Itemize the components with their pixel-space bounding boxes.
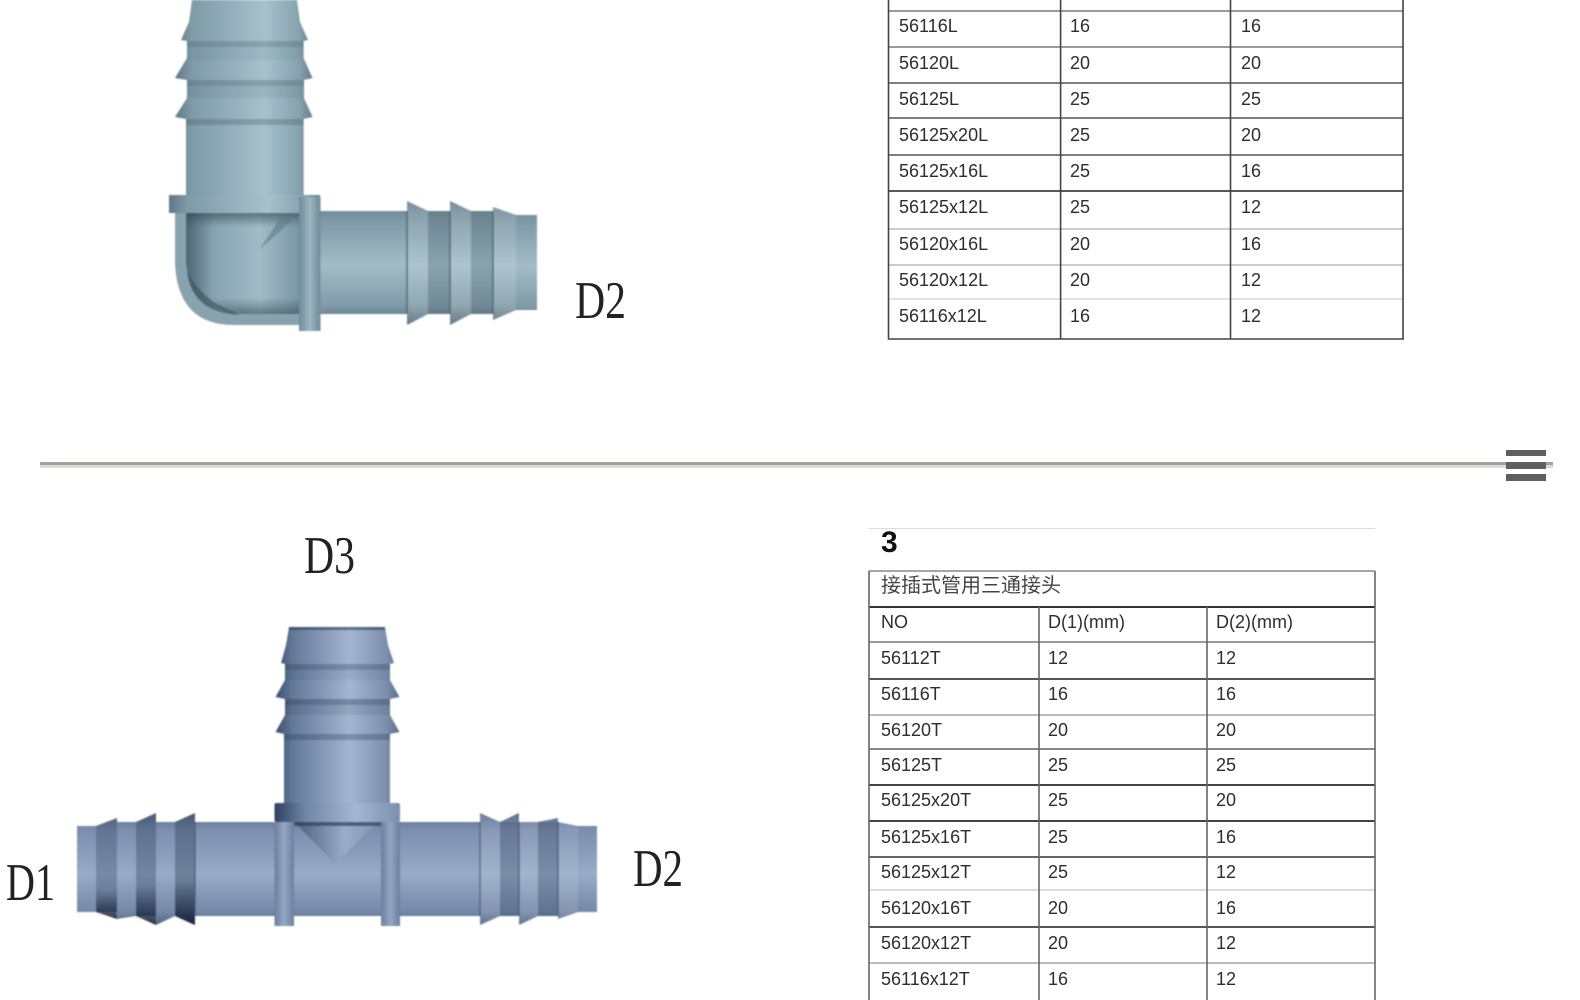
table 1 rows: 56120x16L (899, 234, 988, 254)
table 2 rows: 56120x16T (881, 898, 971, 918)
table 1 rows: 56116L (899, 16, 958, 36)
table 2 rows: 20 (1216, 790, 1236, 810)
tee: horizontal barbed tube (77, 813, 597, 925)
table 1 rows: 56125L (899, 89, 959, 109)
tee: right barb lit faces (480, 813, 578, 925)
tee: vertical barbed stem (276, 627, 400, 805)
elbow: barb lit faces (407, 201, 516, 325)
table 1 rows: 20 (1070, 234, 1090, 254)
section number 3: 3 (881, 526, 898, 559)
label D2 (elbow): D2 (575, 272, 626, 330)
table 2 rows: 25 (1048, 790, 1068, 810)
tee: junction shadow (294, 822, 381, 826)
table 2 rows: 56120x12T (881, 933, 971, 953)
table 1 rows (899, 16, 1261, 326)
table 2 rows: NO (881, 612, 908, 632)
table 2 rows: 12 (1048, 648, 1068, 668)
tee: stem groove bands (284, 664, 390, 740)
table 2 rows: 25 (1216, 755, 1236, 775)
elbow: vertical collar (299, 197, 320, 331)
table 1 rows: 56125x16L (899, 161, 988, 181)
label D2 (tee): D2 (633, 840, 683, 898)
table 2 rows: 16 (1216, 827, 1236, 847)
table 2 rows: 25 (1048, 755, 1068, 775)
table 1 rows: 16 (1241, 16, 1261, 36)
table: tee sizes (869, 528, 1375, 1000)
table 2 rows: 16 (1048, 969, 1068, 989)
tee: barb shadow 2 (136, 885, 156, 925)
table 1 rows: 20 (1070, 53, 1090, 73)
table 2 rows: D(2)(mm) (1216, 612, 1293, 632)
tee: left vertical collar (274, 822, 294, 926)
elbow: vertical barbed stem (175, 0, 312, 197)
table 1 rows: 56125x12L (899, 197, 988, 217)
table 1 grid (888, 0, 1404, 340)
table 1 rows: 56125x20L (899, 125, 988, 145)
tee: left barb shadow 1 (96, 890, 117, 919)
tee: junction collar (274, 803, 400, 822)
table 1 rows: 25 (1070, 161, 1090, 181)
table 1 rows: 56120x12L (899, 270, 988, 290)
table 2 rows: 20 (1048, 933, 1068, 953)
table 2 rows: 56116T (881, 684, 941, 704)
table 1 rows: 20 (1070, 270, 1090, 290)
tee: stem top shadow (289, 627, 385, 630)
table 1 rows: 16 (1241, 234, 1261, 254)
elbow: tube groove bands (428, 211, 493, 314)
table 1 rows: 12 (1241, 306, 1261, 326)
icon: hamburger menu (1506, 450, 1546, 481)
elbow: stem groove bands (186, 41, 304, 125)
table 1 rows: 16 (1070, 306, 1090, 326)
tee: left barb dark faces (96, 813, 195, 925)
elbow: bottom shade of bend (212, 298, 300, 314)
table 2 rows: 16 (1216, 684, 1236, 704)
table 2 rows: 20 (1048, 720, 1068, 740)
table 2 rows: 20 (1216, 720, 1236, 740)
table 2 title: 接插式管用三通接头 (881, 574, 1061, 597)
table: elbow sizes (888, 0, 1404, 340)
table 1 rows: 16 (1241, 161, 1261, 181)
elbow: horizontal collar (169, 195, 320, 213)
table 2 rows: 56125x16T (881, 827, 971, 847)
tee: barb shadow 3 (175, 880, 195, 925)
table 2 rows: 20 (1048, 898, 1068, 918)
table 2 rows: 56120T (881, 720, 942, 740)
table 1 rows: 16 (1070, 16, 1090, 36)
table 1 rows: 25 (1070, 197, 1090, 217)
table 1 rows: 56116x12L (899, 306, 987, 326)
elbow fitting illustration (169, 0, 537, 331)
table 2 rows: 56112T (881, 648, 941, 668)
table 2 rows: 56125T (881, 755, 942, 775)
table 1 rows: 25 (1070, 89, 1090, 109)
label D1: D1 (6, 854, 55, 912)
table 2 rows: 56125x20T (881, 790, 971, 810)
table 2 rows: D(1)(mm) (1048, 612, 1125, 632)
table 2 rows: 56125x12T (881, 862, 971, 882)
tee: barb edge lines (195, 822, 558, 916)
table 2 rows: 12 (1216, 933, 1236, 953)
table 1 rows: 20 (1241, 53, 1261, 73)
elbow: inner bend body (186, 213, 300, 314)
elbow: bend shadow (187, 272, 238, 315)
tee fitting illustration (77, 627, 597, 926)
tee: right groove bands (500, 822, 558, 916)
table 2 rows (881, 612, 1293, 989)
table 2 rows: 16 (1048, 684, 1068, 704)
table 2 rows: 25 (1048, 862, 1068, 882)
table 2 rows: 12 (1216, 648, 1236, 668)
elbow: barb edge lines (407, 211, 493, 314)
table 2 rows: 12 (1216, 862, 1236, 882)
elbow: top shade of bend (186, 213, 300, 227)
table 2 rows: 16 (1216, 898, 1236, 918)
table 2 rows: 12 (1216, 969, 1236, 989)
label D3: D3 (304, 527, 355, 585)
table 2 rows: 25 (1048, 827, 1068, 847)
elbow: horizontal barbed tube (320, 201, 537, 325)
table 1 rows: 12 (1241, 197, 1261, 217)
table 2 grid (869, 528, 1375, 1000)
table 1 rows: 12 (1241, 270, 1261, 290)
elbow: mitre highlight (259, 217, 296, 250)
table 1 rows: 20 (1241, 125, 1261, 145)
tee: cone joint (294, 822, 379, 863)
table 2 rows: 56116x12T (881, 969, 970, 989)
tee: right vertical collar (381, 822, 400, 926)
table 1 rows: 25 (1241, 89, 1261, 109)
elbow: outer bend shell (175, 210, 302, 325)
table 1 rows: 56120L (899, 53, 959, 73)
table 1 rows: 25 (1070, 125, 1090, 145)
